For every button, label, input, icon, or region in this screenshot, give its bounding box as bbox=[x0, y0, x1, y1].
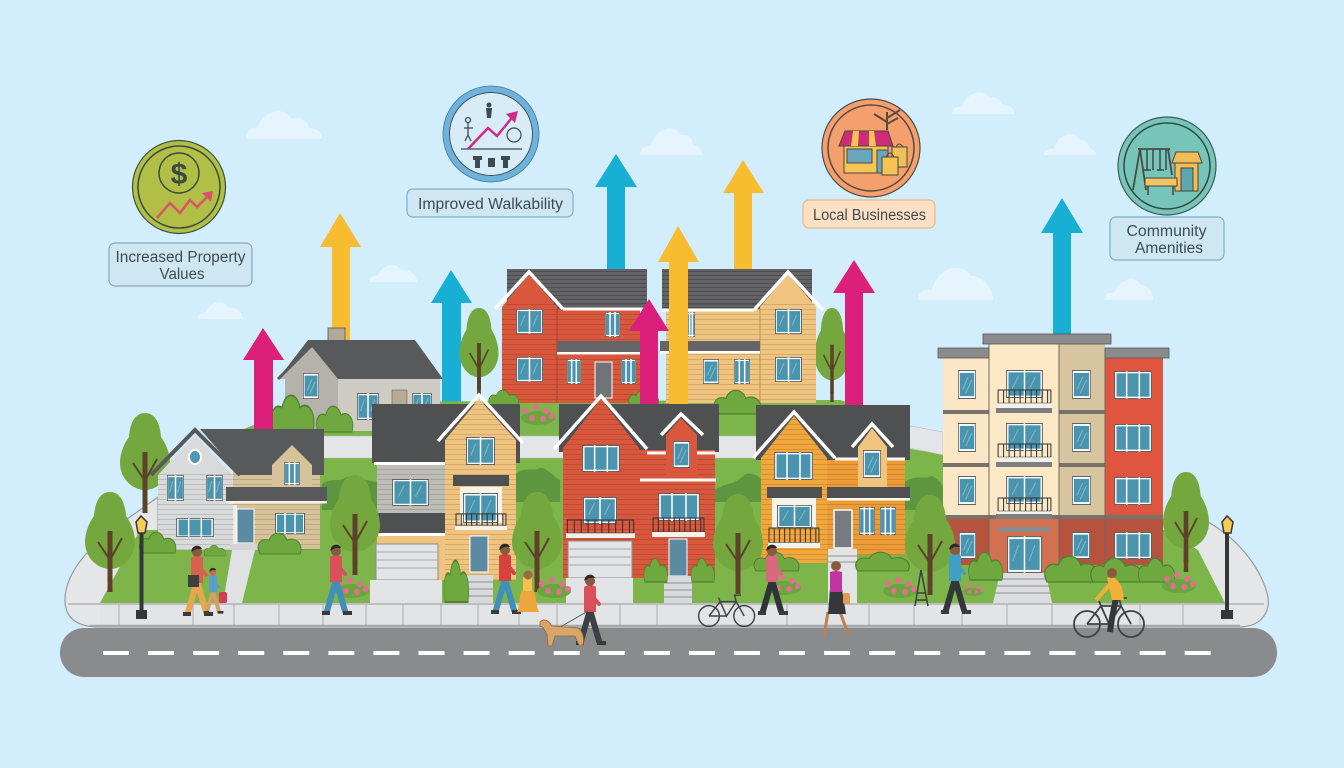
person: man with child bbox=[491, 544, 539, 614]
house: grey back left bbox=[278, 328, 443, 431]
house: yellow back center bbox=[660, 269, 823, 403]
house: light grey front left bbox=[151, 429, 327, 550]
cyclist bbox=[1074, 568, 1144, 637]
hill lawn bbox=[237, 400, 945, 570]
house: orange front bbox=[753, 405, 910, 563]
arrow: cyan right bbox=[1041, 198, 1083, 340]
clouds bbox=[198, 92, 1153, 319]
benefit: local businesses bbox=[803, 99, 935, 228]
sidewalk bbox=[68, 604, 1264, 626]
arrow: cyan far left bbox=[431, 270, 472, 410]
house: red front bbox=[554, 396, 719, 578]
benefit: community amenities bbox=[1110, 117, 1224, 260]
back street bbox=[322, 425, 943, 458]
label: community amenities bbox=[1110, 217, 1224, 260]
dark hedges bbox=[322, 468, 945, 510]
street lamp: right bbox=[1221, 516, 1233, 619]
label: community amenities: Community bbox=[1126, 223, 1207, 240]
arrow: magenta left bbox=[243, 328, 284, 432]
arrow: cyan center bbox=[595, 154, 637, 275]
arrow: yellow tall center bbox=[658, 226, 699, 404]
pavement base bbox=[65, 497, 1268, 627]
tree: behind left bbox=[460, 308, 498, 398]
person: man in blue bbox=[941, 544, 971, 614]
icon: pedestrians and trend bbox=[443, 86, 539, 182]
label: increased property values: Values bbox=[160, 266, 205, 283]
person: man walking left bbox=[322, 545, 352, 615]
front lawn bbox=[100, 530, 1225, 603]
label: local businesses: Local Businesses bbox=[813, 207, 926, 224]
tree: far left back bbox=[120, 413, 170, 513]
arrow: magenta center bbox=[629, 299, 669, 404]
tree: behind right bbox=[814, 308, 850, 402]
icon: dollar with rising trend: $ bbox=[171, 158, 188, 191]
icon: storefront and shopping bags bbox=[822, 99, 920, 197]
road bbox=[60, 628, 1277, 677]
house: red back center bbox=[495, 269, 647, 403]
person: man walking dog bbox=[540, 575, 606, 646]
trees: front row bbox=[85, 472, 1209, 595]
arrow: yellow left bbox=[320, 213, 361, 345]
apartment building bbox=[938, 334, 1169, 603]
icon: dollar with rising trend bbox=[132, 140, 226, 234]
label: increased property values: Increased Property bbox=[116, 249, 246, 266]
house: yellow and grey, front bbox=[372, 395, 523, 580]
person: woman in magenta bbox=[824, 561, 850, 636]
benefit: increased property values bbox=[109, 140, 252, 286]
back bushes bbox=[271, 390, 761, 432]
label: improved walkability bbox=[407, 189, 573, 217]
person: woman with bag bbox=[758, 545, 788, 615]
bushes and flowers bbox=[139, 532, 1196, 602]
person: woman with bag and child bbox=[183, 546, 227, 616]
label: increased property values bbox=[109, 243, 252, 286]
benefit: improved walkability bbox=[407, 86, 573, 217]
bicycle: parked bbox=[699, 595, 755, 626]
sandwich board bbox=[915, 570, 928, 606]
walkways and steps bbox=[223, 549, 857, 603]
arrow: yellow center bbox=[723, 160, 764, 275]
arrow: magenta right bbox=[833, 260, 875, 407]
label: community amenities: Amenities bbox=[1135, 240, 1203, 257]
label: improved walkability: Improved Walkability bbox=[418, 196, 563, 213]
icon: playground and pavilion bbox=[1118, 117, 1216, 215]
street lamp: left bbox=[136, 516, 147, 619]
